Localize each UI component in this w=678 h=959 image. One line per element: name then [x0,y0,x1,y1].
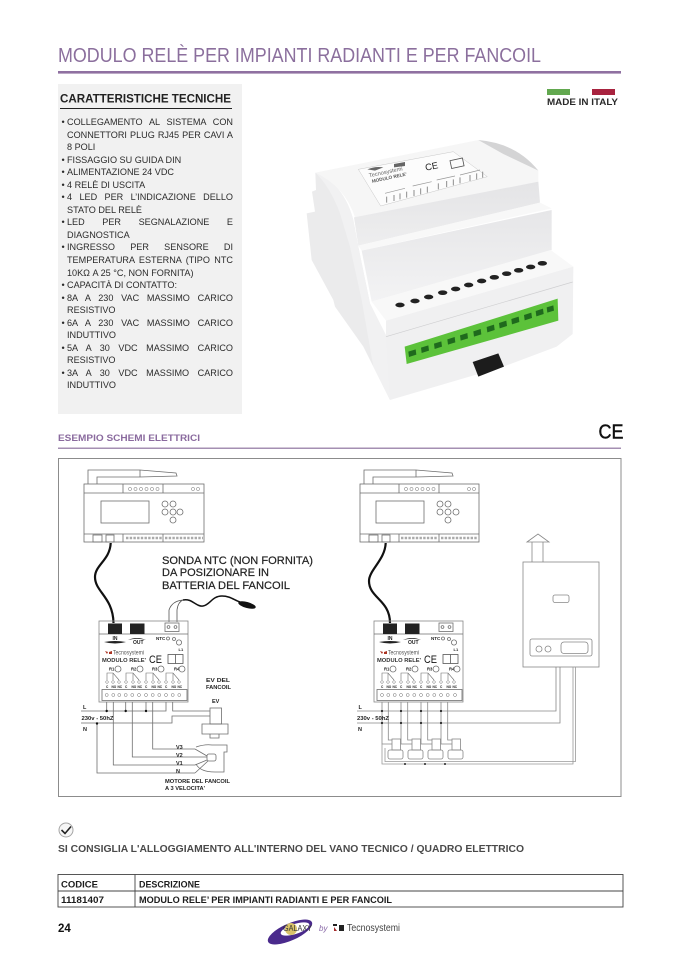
table: product code [58,874,623,907]
features list: 6A A 230 VAC MASSIMO CARICO [67,318,233,328]
NTC probe caption: BATTERIA DEL FANCOIL [162,580,290,592]
right relay module: NC [432,685,438,689]
right relay module: C [381,685,384,689]
left relay module: IN [112,636,118,642]
left relay module: NC [178,685,183,689]
features list: FISSAGGIO SU GUIDA DIN [67,155,181,165]
left relay module: L1 [178,647,184,652]
left relay module: R1 [109,666,115,672]
features list: 8 POLI [67,142,95,152]
NTC probe caption: DA POSIZIONARE IN [162,567,269,579]
right data cable [369,543,390,623]
left relay module: NO [152,685,157,689]
footer logo: Tecnosystemi [347,922,400,934]
top face [315,140,538,217]
features list: LED PER SEGNALAZIONE E [67,217,233,227]
right relay module: R2 [406,666,412,672]
right relay module: NO [446,685,452,689]
left wiring labels: EV DEL [206,678,231,684]
left wiring labels: V3 [176,745,183,751]
right relay module: NO [386,685,392,689]
features list: 10KΩ A 25 °C, NON FORNITA) [67,268,194,278]
right relay module: NO [406,685,412,689]
footer logo: by [319,924,328,933]
right wiring [357,667,576,765]
icon: EV valve [202,708,228,738]
features list [62,117,233,390]
boiler [523,534,599,667]
left relay module: NO [132,685,137,689]
right relay module: C [420,685,423,689]
NTC probe caption: SONDA NTC (NON FORNITA) [162,555,313,567]
left wiring labels: FANCOIL [206,685,232,691]
made in italy badge [547,89,618,107]
left data cable [95,543,114,623]
right relay module: NC [392,685,398,689]
left wiring labels: V2 [176,753,183,759]
features list: CAPACITÀ DI CONTATTO: [67,280,177,290]
icon: check mark [59,823,73,837]
features list: 4 LED PER L’INDICAZIONE DELLO [67,192,233,202]
printed label: MODULO RELE' [371,172,407,184]
right wiring labels: L [358,705,362,711]
right relay module: C [440,685,443,689]
installation note: SI CONSIGLIA L'ALLOGGIAMENTO ALL'INTERNO DEL VANO TECNICO / QUADRO ELETTRICO [58,844,524,855]
right relay module: L1 [454,647,459,652]
panel: technical features background [58,84,242,414]
title: MODULO RELÈ PER IMPIANTI RADIANTI E PER FANCOIL [58,44,541,67]
left relay module: NTC [156,636,166,641]
diagram: right boiler wiring [357,470,599,765]
right relay module: IN [388,636,393,642]
left wiring labels: EV [212,699,220,705]
features list: 4 RELÈ DI USCITA [67,180,145,190]
step [358,203,552,251]
product photo: relay module [307,140,573,400]
features list: 3A A 30 VDC MASSIMO CARICO [67,368,233,378]
right relay module: R1 [384,666,390,672]
printed label: Tecnosystemi [369,166,403,179]
left wiring [81,702,210,773]
left relay module: R2 [131,666,137,672]
right relay module: NC [412,685,418,689]
black din clip [473,353,504,377]
right relay module: C [400,685,403,689]
left relay module: OUT [133,640,144,646]
left relay module: NC [158,685,163,689]
left wiring labels [82,678,232,792]
left wiring labels: 230v - 50hZ [82,716,114,722]
lower top with holes [372,250,573,321]
features list: DIAGNOSTICA [67,230,130,240]
left relay module: C [106,685,109,689]
icon: CE mark: CE [598,422,624,444]
table: product code: MODULO RELE’ PER IMPIANTI RADIANTI E PER FANCOIL [139,895,393,905]
right wiring labels: 230v - 50hZ [357,716,390,722]
left side of enclosure [307,173,390,400]
left wiring labels: MOTORE DEL FANCOIL [165,779,231,785]
features list: 8A A 230 VAC MASSIMO CARICO [67,293,233,303]
features list: INDUTTIVO [67,330,116,340]
right relay module [374,621,463,702]
middle front [362,210,552,302]
NTC probe [169,596,256,622]
diagram: left fancoil wiring [81,470,313,792]
left relay module: Tecnosystemi [113,650,144,656]
right wiring labels: N [358,727,362,733]
table: product code: 11181407 [61,895,104,905]
table: product code: DESCRIZIONE [139,880,200,890]
right relay module: OUT [408,640,419,646]
lower front [386,267,573,400]
right wiring labels [357,705,390,733]
right relay module: NO [426,685,432,689]
features list: TEMPERATURA ESTERNA (TIPO NTC [67,255,233,265]
upper front [354,182,540,246]
footer logo [265,914,400,950]
features list: RESISTIVO [67,305,116,315]
NTC probe caption [162,555,313,592]
icon: fan motor [195,745,227,773]
features list: CONNETTORI PLUG RJ45 PER CAVI A [67,130,233,140]
table: product code: CODICE [61,880,98,890]
heading: technical features: CARATTERISTICHE TECNICHE [60,92,231,106]
printed label: CE [424,160,439,173]
page number: 24 [58,923,71,935]
left relay module: NC [118,685,123,689]
left relay module: NC [138,685,143,689]
printed label [358,152,487,206]
left relay module: C [165,685,168,689]
left wiring labels: L [83,705,87,711]
right relay module: CE [424,654,437,666]
right relay module: NC [452,685,458,689]
made in italy badge: MADE IN ITALY [547,97,618,107]
left relay module: NO [172,685,177,689]
left relay module: R4 [174,666,180,672]
features list: ALIMENTAZIONE 24 VDC [67,167,174,177]
left wiring labels: N [83,727,87,733]
right relay module: NTC [431,636,441,641]
left relay module: C [145,685,148,689]
features list: RESISTIVO [67,355,116,365]
left relay module: R3 [152,666,158,672]
left relay module: NO [112,685,117,689]
left relay module: MODULO RELE' [102,658,147,664]
features list: INDUTTIVO [67,380,116,390]
left wiring labels: A 3 VELOCITA' [165,786,206,792]
left relay module [99,621,188,702]
left wiring labels: N [176,769,180,775]
green terminal strip [405,299,558,364]
right relay module: Tecnosystemi [388,650,419,656]
right relay module: MODULO RELE' [377,658,422,664]
right relay module: R3 [427,666,433,672]
features list: STATO DEL RELÈ [67,205,142,215]
right controller [360,470,479,542]
left controller [84,470,204,542]
left relay module: CE [149,654,162,666]
left wiring labels: V1 [176,761,183,767]
footer logo: GALAXY [283,924,313,933]
right relay module: R4 [449,666,455,672]
rear shadow [478,140,538,171]
left relay module: C [125,685,128,689]
features list: INGRESSO PER SENSORE DI [67,242,233,252]
panel: wiring diagrams [58,458,621,796]
features list: COLLEGAMENTO AL SISTEMA CON [67,117,233,127]
features list: 5A A 30 VDC MASSIMO CARICO [67,343,233,353]
section heading: wiring examples: ESEMPIO SCHEMI ELETTRICI [58,433,200,444]
